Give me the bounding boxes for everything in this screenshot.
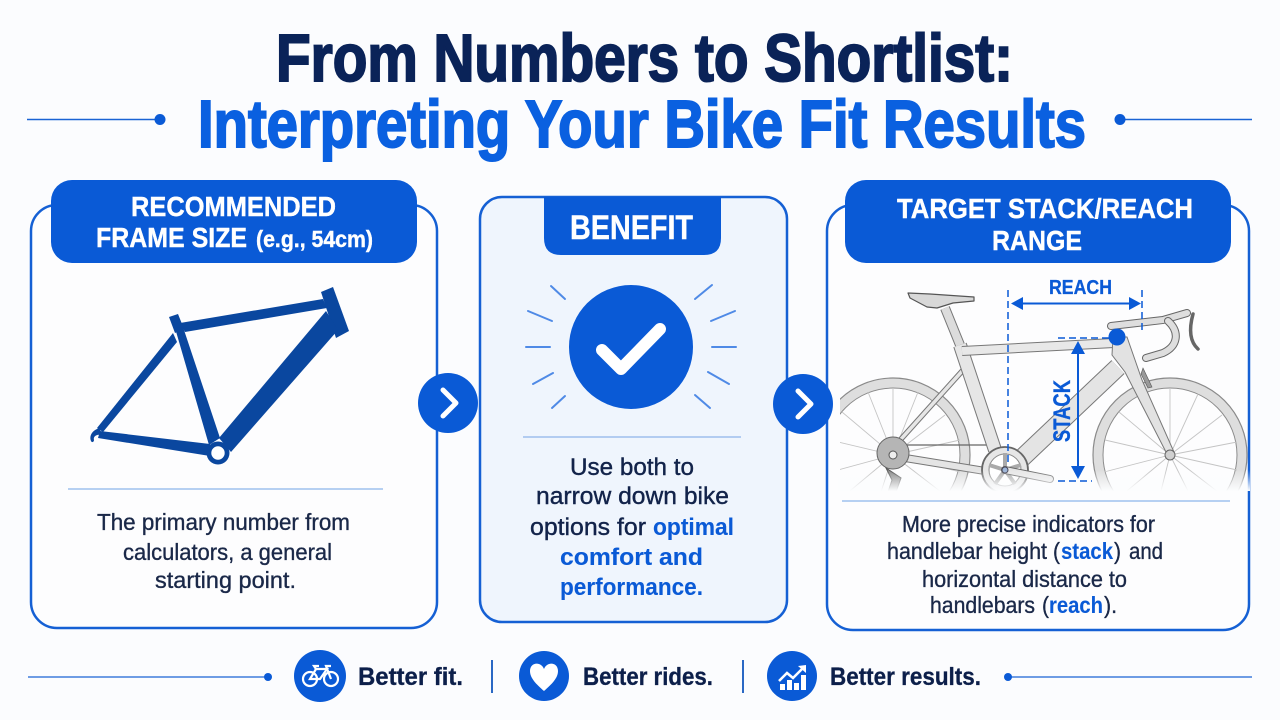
- icon: bicycle: [303, 666, 338, 686]
- panel: benefit: [480, 197, 787, 622]
- dimension: stack: STACK: [1049, 379, 1076, 442]
- title: Interpreting Your Bike Fit Results: [198, 87, 1086, 162]
- front wheel: [1092, 377, 1248, 490]
- panel: target stack and reach range: [816, 180, 1250, 630]
- text: stack and reach description: (: [1042, 592, 1049, 618]
- title accent: right line: [1114, 114, 1252, 125]
- title accent: left line: [27, 114, 166, 125]
- dimension: reach: REACH: [1049, 277, 1112, 299]
- icon: check mark with rays: [526, 285, 736, 409]
- header: benefit: BENEFIT: [570, 209, 693, 247]
- header: recommended frame size: RECOMMENDED: [131, 191, 336, 222]
- text: frame size description: The primary number from: [97, 509, 350, 535]
- footer item: better fit: Better fit.: [358, 663, 463, 691]
- header: target stack and reach range: TARGET STACK/REACH: [897, 193, 1193, 224]
- text: stack and reach description: [887, 511, 1163, 618]
- illustration: road bike: [840, 292, 1250, 491]
- text: stack and reach description: horizontal distance to: [922, 566, 1127, 592]
- header: benefit: [544, 197, 721, 255]
- text: benefit description: comfort and: [560, 544, 703, 571]
- text: stack and reach description: More precise indicators for: [902, 511, 1155, 537]
- text: frame size description: [97, 509, 350, 593]
- header: recommended frame size: FRAME SIZE: [96, 222, 247, 253]
- arrow: frame size to benefit: [418, 373, 478, 433]
- dimension: reach: [1008, 277, 1142, 465]
- handlebar: [1111, 313, 1198, 358]
- dimension: stack: [1049, 328, 1126, 481]
- text: stack and reach description: reach: [1049, 592, 1103, 618]
- header: target stack and reach range: RANGE: [992, 225, 1082, 256]
- header: recommended frame size: [51, 180, 417, 263]
- footer item: better results: Better results.: [830, 663, 981, 691]
- text: stack and reach description: stack: [1061, 538, 1113, 564]
- rear wheel: [840, 377, 971, 490]
- text: stack and reach description: handlebars: [930, 592, 1035, 618]
- text: benefit description: options for: [530, 514, 646, 541]
- text: frame size description: calculators, a general: [123, 539, 332, 565]
- text: frame size description: starting point.: [155, 567, 296, 593]
- icon: heart: [530, 664, 558, 691]
- header: recommended frame size: (e.g., 54cm): [256, 226, 373, 252]
- text: benefit description: narrow down bike: [536, 483, 729, 510]
- icon: rising chart: [779, 665, 806, 690]
- text: benefit description: [530, 454, 734, 601]
- footer item: better fit: [294, 650, 463, 702]
- footer accent: right line: [1004, 673, 1252, 681]
- arrow: benefit to stack and reach: [773, 374, 833, 434]
- footer item: better results: [767, 651, 981, 701]
- drivetrain: [877, 437, 1050, 493]
- text: stack and reach description: ).: [1104, 592, 1117, 618]
- saddle: [908, 293, 974, 308]
- footer item: better rides: [519, 651, 713, 701]
- panel: recommended frame size: [31, 180, 437, 628]
- header: target stack and reach range: [845, 180, 1231, 263]
- text: benefit description: optimal: [653, 514, 734, 541]
- icon: bike frame: [90, 287, 349, 464]
- text: benefit description: performance.: [560, 574, 703, 601]
- text: stack and reach description: and: [1129, 538, 1163, 564]
- title: From Numbers to Shortlist:: [276, 21, 1013, 96]
- title: [198, 21, 1086, 162]
- text: stack and reach description: handlebar height: [887, 538, 1048, 564]
- text: benefit description: Use both to: [570, 454, 694, 481]
- frame tubes: [893, 308, 1118, 471]
- text: stack and reach description: (: [1053, 538, 1060, 564]
- footer accent: left line: [28, 673, 272, 681]
- text: stack and reach description: ): [1114, 538, 1121, 564]
- footer item: better rides: Better rides.: [583, 663, 713, 691]
